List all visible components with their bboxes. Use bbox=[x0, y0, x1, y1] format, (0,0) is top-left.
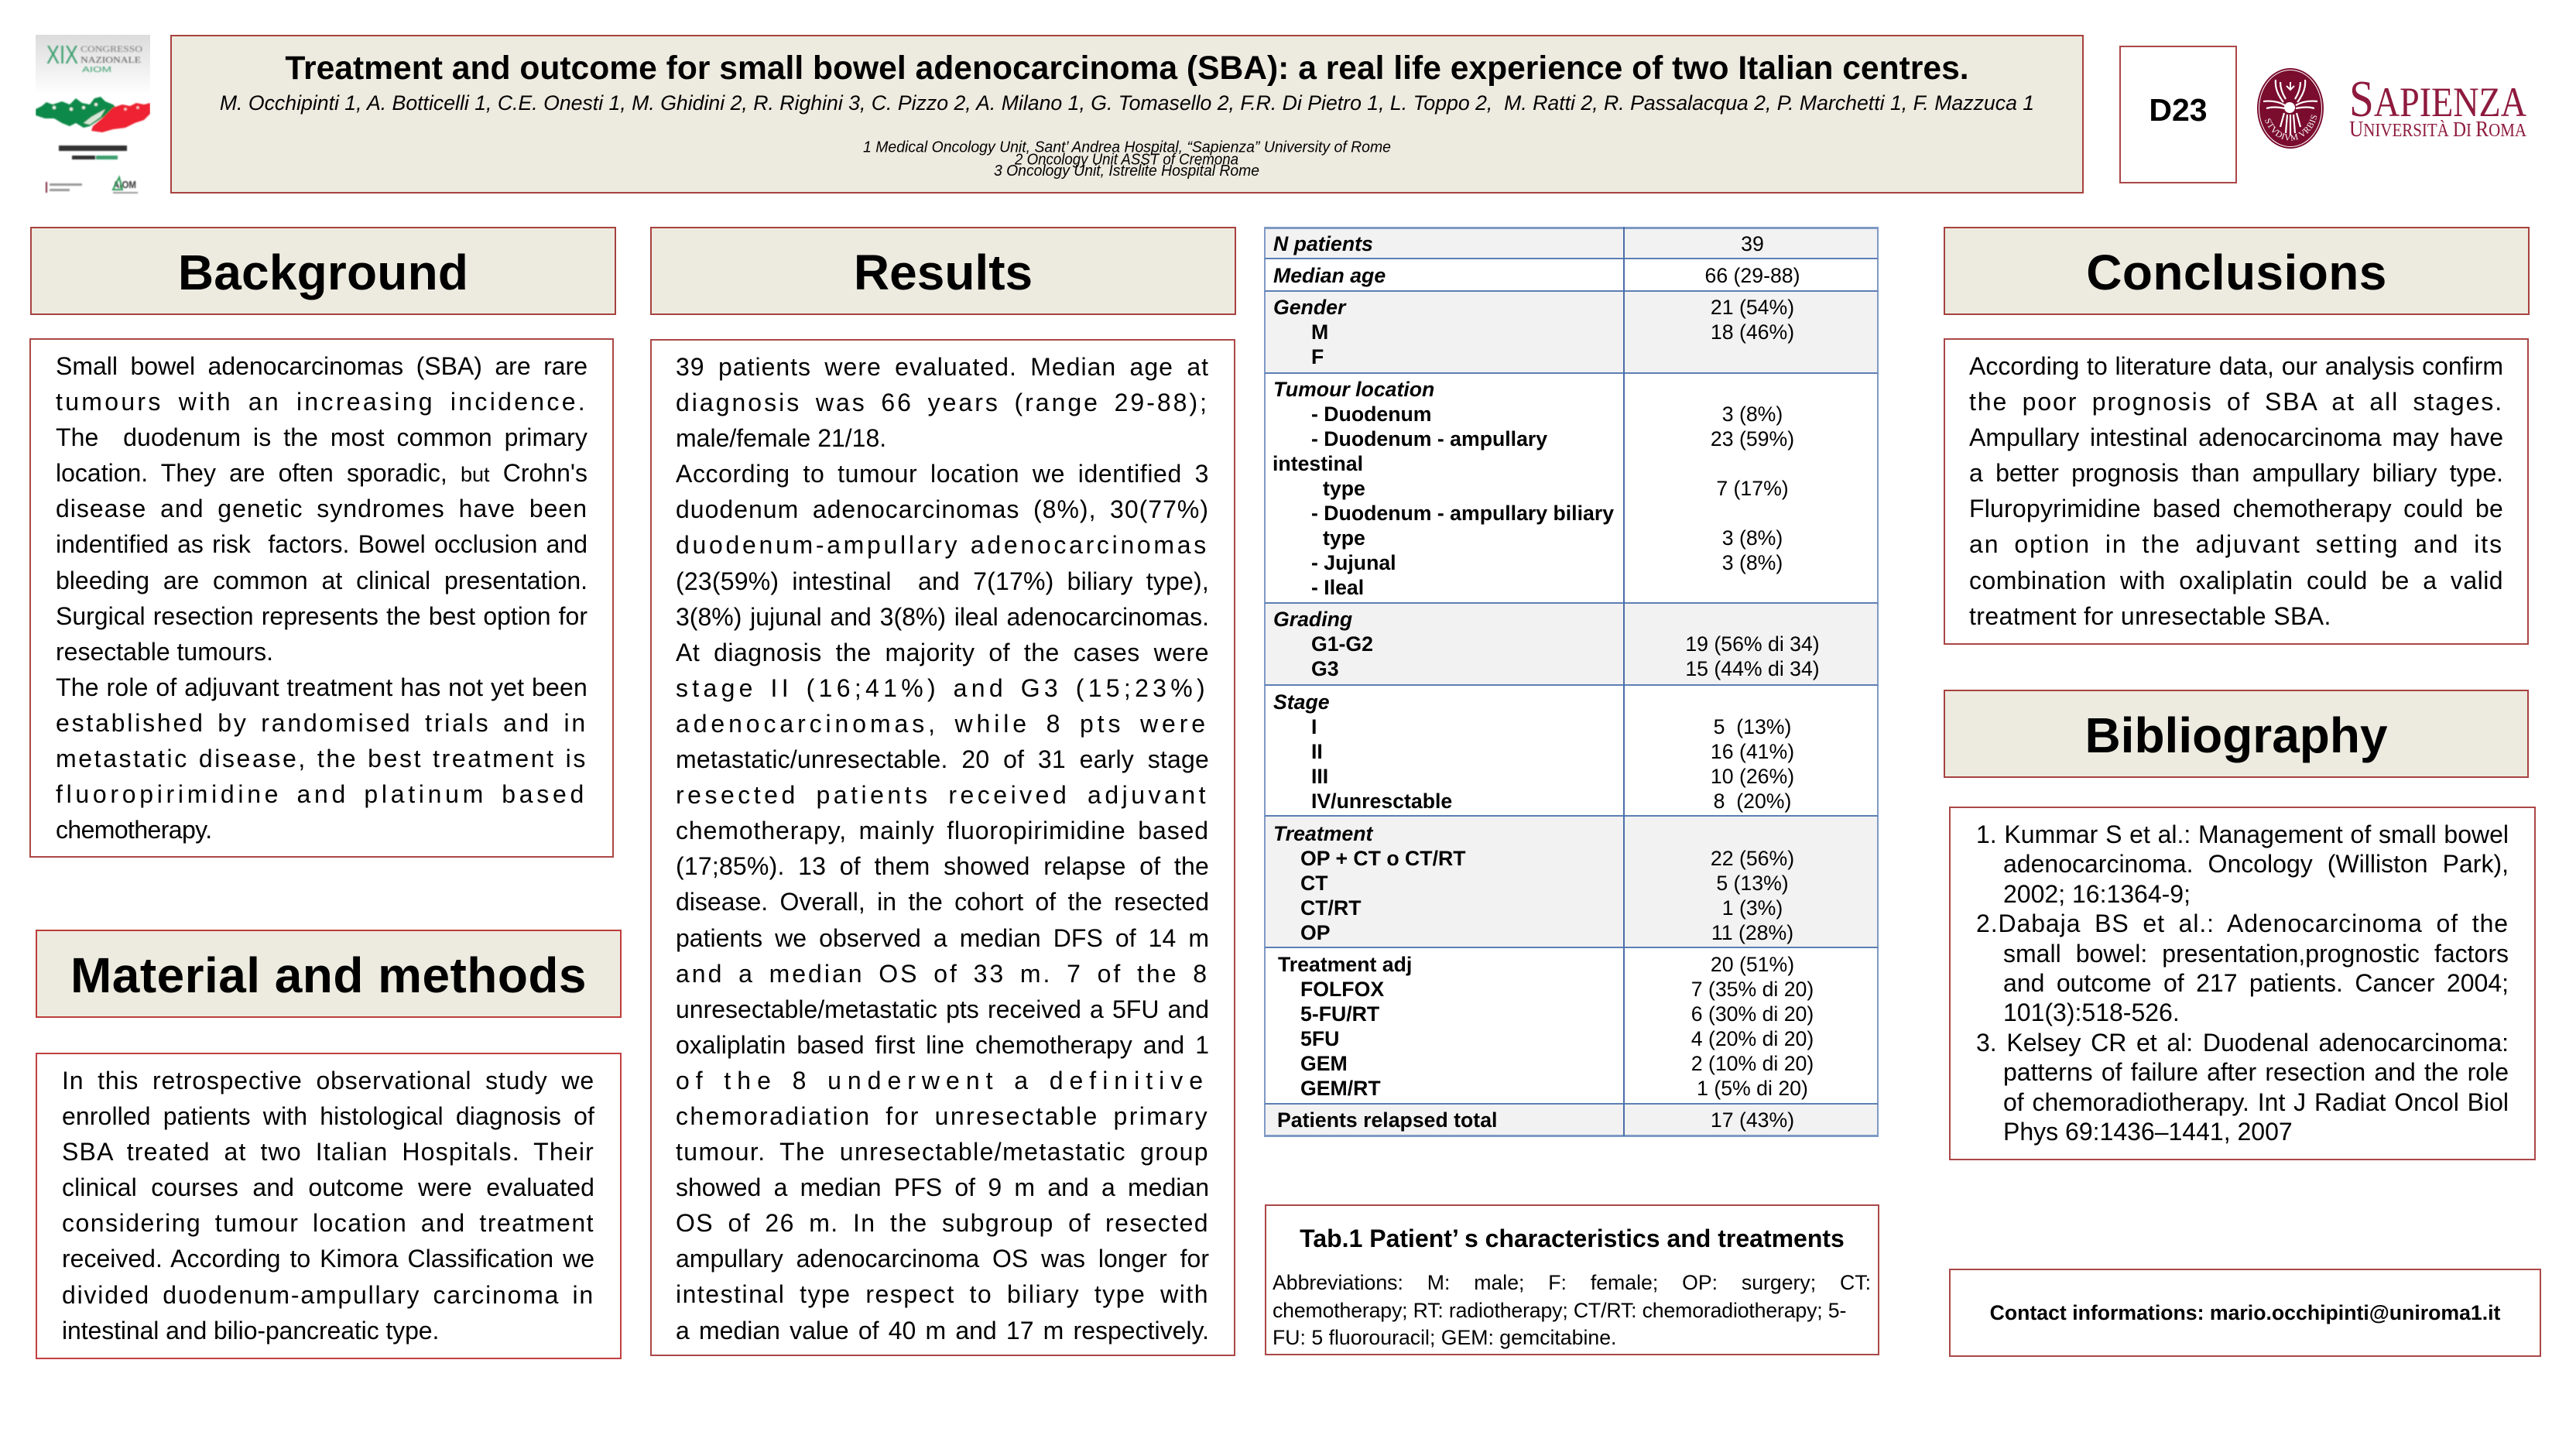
background paragraph bbox=[56, 352, 587, 844]
row: Patients relapsed total bbox=[1264, 1105, 1879, 1137]
row: Grading: G1-G2 bbox=[1311, 632, 1373, 656]
reference 2: 2.Dabaja BS et al.: Adenocarcinoma of the bbox=[1976, 909, 2509, 937]
conclusions paragraph: a better prognosis than ampullary biliary type. bbox=[1969, 459, 2503, 487]
results paragraph: 39 patients were evaluated. Median age at bbox=[676, 353, 1209, 381]
results paragraph: intestinal type respect to biliary type with bbox=[676, 1280, 1209, 1308]
row: Gender: M bbox=[1311, 320, 1328, 344]
reference 2: 101(3):518-526. bbox=[2003, 999, 2180, 1026]
row: Tumour location: - Ileal bbox=[1311, 576, 1364, 599]
results paragraph: chemoradiation for unresectable primary bbox=[676, 1102, 1209, 1130]
row: Tumour location: 3 (8%) bbox=[1722, 526, 1783, 550]
reference 1: 1. Kummar S et al.: Management of small bowel bbox=[1976, 820, 2509, 848]
row: Treatment adj: 6 (30% di 20) bbox=[1691, 1002, 1814, 1026]
row: Treatment: CT/RT bbox=[1300, 896, 1361, 920]
results paragraph: At diagnosis the majority of the cases were bbox=[676, 639, 1209, 666]
row: Tumour location: 3 (8%) bbox=[1722, 551, 1783, 574]
row: Gender bbox=[1264, 292, 1879, 374]
row: Treatment adj: GEM/RT bbox=[1300, 1077, 1381, 1100]
methods paragraph: In this retrospective observational study we bbox=[62, 1067, 594, 1094]
row: Gender: F bbox=[1311, 345, 1324, 368]
conclusions paragraph: According to literature data, our analysis confirm bbox=[1969, 352, 2503, 380]
row: Treatment: 5 (13%) bbox=[1716, 872, 1789, 895]
row: N patients: N patients bbox=[1273, 232, 1373, 255]
results paragraph: unresectable/metastatic pts received a 5FU and bbox=[676, 995, 1209, 1023]
conclusions paragraph: combination with oxaliplatin could be a valid bbox=[1969, 567, 2503, 594]
conclusions paragraph: the poor prognosis of SBA at all stages. bbox=[1969, 388, 2503, 416]
affiliations: 1 Medical Oncology Unit, Sant’ Andrea Hospital, “Sapienza” University of Rome bbox=[863, 139, 1391, 156]
row: Patients relapsed total: 17 (43%) bbox=[1711, 1108, 1794, 1132]
row: Stage: IV/unresctable bbox=[1311, 790, 1452, 813]
conclusions paragraph: Fluropyrimidine based chemotherapy could be bbox=[1969, 495, 2503, 522]
row: Tumour location: 23 (59%) bbox=[1711, 427, 1794, 450]
affiliations: 3 Oncology Unit, Istrelite Hospital Rome bbox=[994, 163, 1259, 180]
row: Gender: Gender bbox=[1273, 296, 1345, 319]
heading: Bibliography bbox=[1944, 690, 2529, 778]
results paragraph: OS of 26 m. In the subgroup of resected bbox=[676, 1209, 1209, 1237]
row: Treatment: OP bbox=[1300, 921, 1331, 944]
row: Treatment: CT bbox=[1300, 872, 1328, 895]
row: Tumour location: 3 (8%) bbox=[1722, 402, 1783, 426]
background paragraph: chemotherapy. bbox=[56, 816, 212, 844]
background paragraph: Surgical resection represents the best option for bbox=[56, 602, 587, 630]
row: Median age bbox=[1264, 259, 1879, 292]
row: Treatment bbox=[1264, 817, 1879, 948]
row: Tumour location bbox=[1264, 374, 1879, 604]
conclusions paragraph: Ampullary intestinal adenocarcinoma may have bbox=[1969, 423, 2503, 451]
background paragraph: Small bowel adenocarcinomas (SBA) are rare bbox=[56, 352, 587, 380]
logo: XIX Congresso Nazionale AIOM: CONGRESSO bbox=[80, 43, 142, 54]
results paragraph: resected patients received adjuvant bbox=[676, 781, 1209, 809]
affiliations bbox=[863, 139, 1391, 180]
reference 3 bbox=[1976, 1029, 2509, 1146]
abbreviations: Abbreviations: M: male; F: female; OP: surgery; CT: bbox=[1273, 1271, 1871, 1294]
results paragraph: 3(8%) jujunal and 3(8%) ileal adenocarcinomas. bbox=[676, 603, 1209, 631]
row: Tumour location: - Jujunal bbox=[1311, 551, 1396, 574]
row: Median age: Median age bbox=[1273, 264, 1386, 287]
affiliations: 2 Oncology Unit ASST of Cremona bbox=[1014, 152, 1238, 169]
row: N patients bbox=[1264, 227, 1879, 259]
reference 3: 3. Kelsey CR et al: Duodenal adenocarcinoma: bbox=[1976, 1029, 2509, 1057]
reference 3: Phys 69:1436–1441, 2007 bbox=[2003, 1118, 2293, 1146]
heading: Background bbox=[30, 227, 616, 315]
conclusions paragraph bbox=[1969, 352, 2503, 630]
results paragraph: chemotherapy, mainly fluoropirimidine based bbox=[676, 817, 1209, 844]
row: Treatment adj: GEM bbox=[1300, 1052, 1348, 1075]
heading: Results: Results bbox=[854, 245, 1033, 300]
row: Stage: III bbox=[1311, 765, 1328, 788]
background paragraph: fluoropirimidine and platinum based bbox=[56, 780, 587, 808]
panel: contact information: Contact informations: mario.occhipinti@uniroma1.it bbox=[1990, 1301, 2500, 1324]
row: Stage bbox=[1264, 686, 1879, 817]
results paragraph: duodenum-ampullary adenocarcinomas bbox=[676, 531, 1209, 559]
background paragraph: metastatic disease, the best treatment is bbox=[56, 745, 587, 772]
row: Treatment adj: 4 (20% di 20) bbox=[1691, 1027, 1814, 1050]
row: Treatment adj: 7 (35% di 20) bbox=[1691, 978, 1814, 1001]
background paragraph: resectable tumours. bbox=[56, 638, 273, 666]
conclusions paragraph: an option in the adjuvant setting and its bbox=[1969, 530, 2503, 558]
reference 3: patterns of failure after resection and the role bbox=[2003, 1058, 2509, 1086]
methods paragraph: considering tumour location and treatment bbox=[62, 1209, 594, 1237]
row: Treatment: OP + CT o CT/RT bbox=[1300, 847, 1466, 870]
panel: table caption bbox=[1265, 1204, 1879, 1355]
background paragraph: established by randomised trials and in bbox=[56, 709, 587, 737]
results paragraph: (17;85%). 13 of them showed relapse of the bbox=[676, 852, 1209, 880]
reference 2: and outcome of 217 patients. Cancer 2004; bbox=[2003, 969, 2509, 997]
row: Treatment: 22 (56%) bbox=[1711, 847, 1794, 870]
reference 1: adenocarcinoma. Oncology (Williston Park), bbox=[2003, 850, 2509, 878]
row: Stage: 5 (13%) bbox=[1714, 715, 1791, 738]
logo: XIX Congresso Nazionale AIOM bbox=[36, 35, 150, 194]
results paragraph: ampullary adenocarcinoma OS was longer for bbox=[676, 1245, 1209, 1273]
row: Tumour location: 7 (17%) bbox=[1716, 477, 1789, 500]
row: Gender: 21 (54%) bbox=[1711, 296, 1794, 319]
heading: Material and methods: Material and methods bbox=[70, 947, 587, 1003]
panel: Conclusions text bbox=[1944, 338, 2529, 645]
results paragraph: According to tumour location we identified 3 bbox=[676, 460, 1209, 488]
title banner bbox=[170, 35, 2084, 194]
caption title: Tab.1 Patient’ s characteristics and treatments bbox=[1300, 1225, 1845, 1252]
row: Treatment adj: 20 (51%) bbox=[1711, 953, 1794, 976]
row: Tumour location: - Duodenum bbox=[1311, 402, 1431, 426]
row: Tumour location: type bbox=[1323, 526, 1365, 550]
heading: Bibliography: Bibliography bbox=[2084, 707, 2388, 763]
background paragraph: location. They are often sporadic, but Crohn's bbox=[56, 459, 587, 487]
heading: Results bbox=[650, 227, 1236, 315]
row: Tumour location: type bbox=[1323, 477, 1365, 500]
reference 1: 2002; 16:1364-9; bbox=[2003, 880, 2191, 908]
row: Grading bbox=[1264, 604, 1879, 686]
row: Treatment: 11 (28%) bbox=[1711, 921, 1793, 944]
abbreviations: FU: 5 fluorouracil; GEM: gemcitabine. bbox=[1273, 1326, 1616, 1349]
row: Grading: 15 (44% di 34) bbox=[1685, 657, 1820, 680]
results paragraph: patients we observed a median DFS of 14 m bbox=[676, 924, 1209, 952]
panel: Results text bbox=[650, 339, 1235, 1356]
panel: Material and methods text bbox=[36, 1053, 622, 1359]
icon: Sapienza seal bbox=[2257, 68, 2324, 149]
column divider bbox=[1623, 227, 1625, 1136]
row: Treatment adj: FOLFOX bbox=[1300, 978, 1384, 1001]
background paragraph: The duodenum is the most common primary bbox=[56, 423, 587, 451]
results paragraph: adenocarcinomas, while 8 pts were bbox=[676, 710, 1209, 738]
row: Treatment adj: Treatment adj bbox=[1278, 953, 1412, 976]
results paragraph: of the 8 underwent a definitive bbox=[676, 1067, 1209, 1094]
heading: Conclusions bbox=[1944, 227, 2530, 315]
methods paragraph: intestinal and bilio-pancreatic type. bbox=[62, 1317, 439, 1345]
heading: Background: Background bbox=[178, 245, 468, 300]
row: Treatment adj: 5FU bbox=[1300, 1027, 1339, 1050]
authors: M. Occhipinti 1, A. Botticelli 1, C.E. Onesti 1, M. Ghidini 2, R. Righini 3, C. Pizzo 2, A. Milano 1, G. Tomasello 2, F.R. Di Pietro 1, L. Toppo 2, M. Ratti 2, R. Passalacqua 2, P. Marchetti 1, F. Mazzuca 1 bbox=[220, 91, 2034, 115]
row: Patients relapsed total: Patients relapsed total bbox=[1277, 1108, 1497, 1132]
logo: XIX Congresso Nazionale AIOM: NAZIONALE bbox=[80, 54, 141, 65]
panel: contact information bbox=[1949, 1269, 2541, 1357]
results paragraph: disease. Overall, in the cohort of the resected bbox=[676, 888, 1209, 916]
row: Stage: 16 (41%) bbox=[1711, 740, 1794, 763]
conclusions paragraph: treatment for unresectable SBA. bbox=[1969, 602, 2331, 630]
results paragraph: tumour. The unresectable/metastatic group bbox=[676, 1138, 1209, 1166]
row: Median age: 66 (29-88) bbox=[1704, 264, 1800, 287]
background paragraph: disease and genetic syndromes have been bbox=[56, 495, 587, 522]
results paragraph: metastatic/unresectable. 20 of 31 early stage bbox=[676, 745, 1209, 773]
poster code box bbox=[2119, 46, 2237, 183]
results paragraph: duodenum adenocarcinomas (8%), 30(77%) bbox=[676, 495, 1209, 523]
row: Treatment: Treatment bbox=[1273, 822, 1372, 845]
row: Stage: Stage bbox=[1273, 690, 1330, 714]
results paragraph bbox=[676, 353, 1209, 1345]
row: Tumour location: intestinal bbox=[1273, 452, 1363, 475]
methods paragraph: divided duodenum-ampullary carcinoma in bbox=[62, 1281, 594, 1309]
logo: XIX Congresso Nazionale AIOM: AIOM bbox=[113, 179, 136, 190]
row: Gender: 18 (46%) bbox=[1711, 320, 1794, 344]
methods paragraph: enrolled patients with histological diagnosis of bbox=[62, 1102, 594, 1130]
panel: Background text bbox=[29, 338, 614, 858]
background paragraph: bleeding are common at clinical presentation. bbox=[56, 567, 587, 594]
table: patient characteristics bbox=[1264, 227, 1879, 1137]
reference 3: of chemoradiotherapy. Int J Radiat Oncol Biol bbox=[2003, 1088, 2509, 1116]
row: Treatment adj: 5-FU/RT bbox=[1300, 1002, 1379, 1026]
logo: XIX Congresso Nazionale AIOM: XIX bbox=[46, 40, 78, 69]
row: Stage: I bbox=[1311, 715, 1317, 738]
results paragraph: showed a median PFS of 9 m and a median bbox=[676, 1173, 1209, 1201]
row: Grading: G3 bbox=[1311, 657, 1339, 680]
reference 2 bbox=[1976, 909, 2509, 1026]
heading: Conclusions: Conclusions bbox=[2086, 245, 2387, 300]
row: Tumour location: - Duodenum - ampullary biliary bbox=[1311, 502, 1614, 525]
abbreviations: chemotherapy; RT: radiotherapy; CT/RT: chemoradiotherapy; 5- bbox=[1273, 1299, 1846, 1322]
row: Treatment adj: 2 (10% di 20) bbox=[1691, 1052, 1814, 1075]
row: Stage: 10 (26%) bbox=[1711, 765, 1794, 788]
results paragraph: (23(59%) intestinal and 7(17%) biliary type), bbox=[676, 567, 1209, 595]
results paragraph: oxaliplatin based first line chemotherapy and 1 bbox=[676, 1031, 1209, 1059]
methods paragraph bbox=[62, 1067, 594, 1345]
results paragraph: stage II (16;41%) and G3 (15;23%) bbox=[676, 674, 1209, 702]
abbreviations bbox=[1273, 1271, 1871, 1349]
methods paragraph: SBA treated at two Italian Hospitals. Their bbox=[62, 1138, 594, 1166]
row: Tumour location: - Duodenum - ampullary bbox=[1311, 427, 1547, 450]
results paragraph: a median value of 40 m and 17 m respectively. bbox=[676, 1317, 1209, 1345]
background paragraph: The role of adjuvant treatment has not yet been bbox=[56, 673, 587, 701]
logo: XIX Congresso Nazionale AIOM: AIOM bbox=[82, 66, 111, 74]
results paragraph: and a median OS of 33 m. 7 of the 8 bbox=[676, 960, 1209, 988]
row: Stage: 8 (20%) bbox=[1714, 790, 1791, 813]
icon: Sapienza seal: STVDIVM VRBIS bbox=[2265, 115, 2317, 141]
row: Grading: 19 (56% di 34) bbox=[1685, 632, 1820, 656]
row: Treatment: 1 (3%) bbox=[1722, 896, 1783, 920]
row: Treatment adj: 1 (5% di 20) bbox=[1697, 1077, 1808, 1100]
row: Grading: Grading bbox=[1273, 608, 1352, 631]
results paragraph: male/female 21/18. bbox=[676, 424, 886, 452]
poster title: Treatment and outcome for small bowel adenocarcinoma (SBA): a real life experience of two Italian centres. bbox=[285, 50, 1969, 87]
background paragraph: indentified as risk factors. Bowel occlusion and bbox=[56, 530, 587, 558]
heading: Material and methods bbox=[36, 930, 622, 1018]
row: Stage: II bbox=[1311, 740, 1323, 763]
methods paragraph: received. According to Kimora Classification we bbox=[62, 1245, 594, 1273]
poster code box: D23 bbox=[2149, 92, 2208, 128]
reference 2: small bowel: presentation,prognostic factors bbox=[2003, 940, 2509, 968]
row: Treatment adj bbox=[1264, 948, 1879, 1105]
row: Tumour location: Tumour location bbox=[1273, 378, 1434, 401]
results paragraph: diagnosis was 66 years (range 29-88); bbox=[676, 389, 1209, 416]
panel: Bibliography list bbox=[1949, 807, 2536, 1160]
row: N patients: 39 bbox=[1741, 232, 1764, 255]
reference 1 bbox=[1976, 820, 2509, 908]
background paragraph: tumours with an increasing incidence. bbox=[56, 388, 587, 416]
methods paragraph: clinical courses and outcome were evaluated bbox=[62, 1173, 594, 1201]
